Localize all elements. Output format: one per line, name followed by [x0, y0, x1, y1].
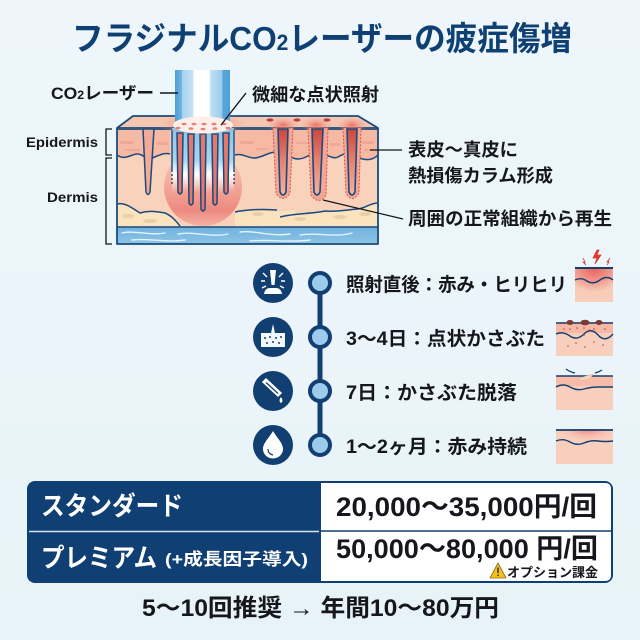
label: CO2 laser: CO2レーザー — [51, 84, 154, 103]
label: thermal damage columns: 表皮〜真皮に — [408, 140, 518, 160]
option warning: オプション課金 — [507, 565, 598, 580]
price table — [27, 481, 613, 583]
surface micro-spots — [266, 118, 330, 122]
surface line — [117, 128, 378, 130]
dermis layer — [117, 128, 378, 228]
summary line: 5〜10回推奨 → 年間10〜80万円 — [142, 595, 499, 622]
laser beam — [175, 70, 230, 126]
step text 2: 3〜4日：点状かさぶた — [346, 328, 545, 350]
icon: laser flash — [253, 263, 293, 303]
laser columns in the dome — [177, 133, 229, 211]
step text 1: 照射直後：赤み・ヒリヒリ — [346, 274, 567, 296]
label: Dermis with bracket: Dermis — [47, 189, 98, 205]
plan note: (+成長因子導入) — [165, 549, 308, 569]
title: フラジナルCO2レーザーの疲症傷増 — [72, 20, 572, 57]
dome side lines — [172, 130, 234, 170]
skin cross-section diagram — [117, 70, 378, 244]
fat speckles — [122, 212, 371, 223]
price: standard: 20,000〜35,000円/回 — [336, 492, 597, 522]
left untreated column — [143, 129, 154, 194]
fat layer — [117, 203, 378, 227]
icon: skin with hair — [253, 317, 293, 357]
treated column glows — [267, 117, 367, 133]
price: premium: 50,000〜80,000 円/回 — [336, 534, 598, 564]
plan: standard: スタンダード — [41, 491, 183, 521]
label: fine dot irradiation — [221, 85, 379, 125]
icon: dropper — [253, 371, 293, 411]
thermal dome — [164, 148, 242, 226]
vessel highlights — [122, 232, 352, 241]
heat glow at laser contact — [159, 112, 247, 136]
step text 3: 7日：かさぶた脱落 — [346, 382, 517, 404]
epidermis texture — [120, 141, 374, 151]
top plane of skin block — [117, 116, 378, 128]
timeline node 1 — [310, 273, 330, 293]
treated columns — [273, 128, 361, 200]
timeline node 3 — [310, 381, 330, 401]
timeline node 2 — [310, 327, 330, 347]
price cells — [321, 483, 611, 581]
label: Dermis with bracket — [47, 158, 112, 244]
label: regeneration: 周囲の正常組織から再生 — [408, 209, 612, 229]
label: thermal damage columns — [370, 140, 553, 186]
label: Epidermis with bracket — [26, 129, 112, 155]
icon: water drop — [253, 425, 293, 465]
laser spot pattern — [173, 116, 233, 134]
thumbnail: persistent redness — [556, 429, 613, 464]
epidermis layer — [117, 128, 378, 160]
thumbnail: redness and tingling — [575, 250, 613, 302]
laser shaft through skin — [172, 128, 234, 192]
thumbnail: scabs — [556, 320, 613, 356]
timeline node 4 — [310, 435, 330, 455]
timeline — [310, 273, 330, 455]
fat and epidermis outlines — [117, 203, 378, 226]
block outline — [117, 128, 378, 244]
label: thermal damage columns: 熱損傷カラム形成 — [408, 165, 553, 186]
blood vessel layer — [117, 227, 378, 244]
label: fine dot irradiation: 微細な点状照射 — [252, 85, 379, 105]
label: regeneration — [323, 200, 612, 229]
label: Epidermis with bracket: Epidermis — [26, 134, 98, 150]
thumbnail: scab shedding — [556, 369, 613, 410]
plan: premium: プレミアム — [41, 543, 157, 573]
step text 4: 1〜2ヶ月：赤み持続 — [346, 436, 527, 458]
